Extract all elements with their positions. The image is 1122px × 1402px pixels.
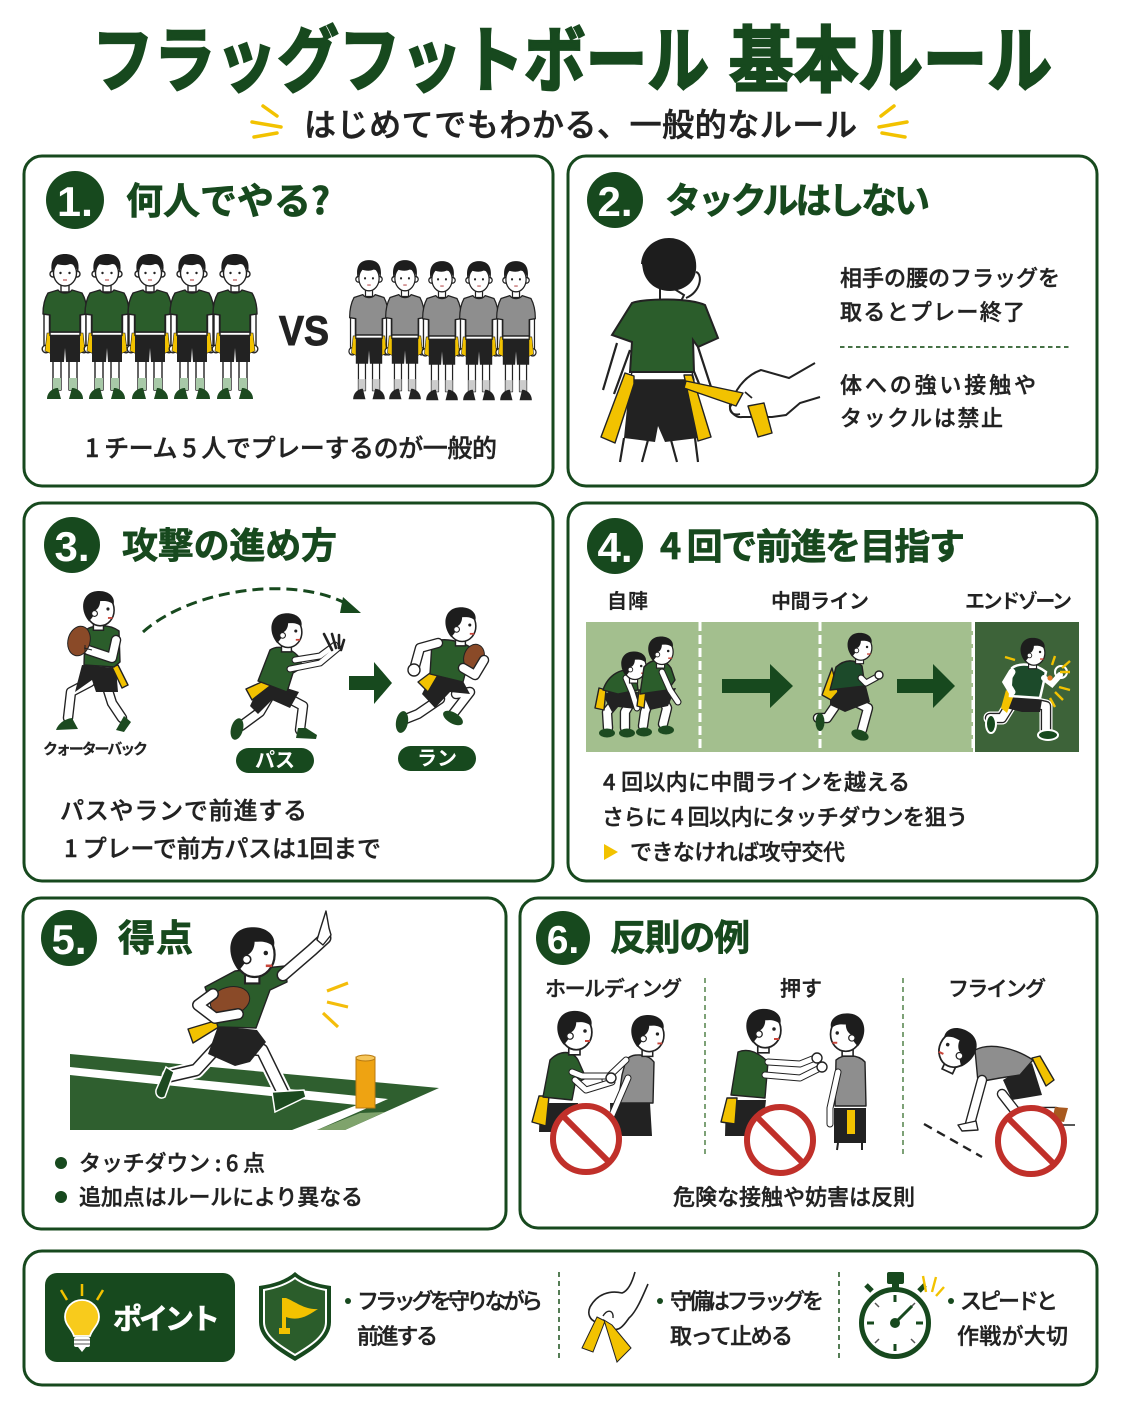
heading: 攻撃の進め方 [122,517,337,569]
run pill [398,742,476,771]
prohibition sign 2 [747,1107,813,1173]
explanation text: できなければ攻守交代 [630,835,845,867]
icon: stopwatch [862,1272,944,1356]
number badge 4 [587,518,643,574]
point label: ポイント [113,1296,220,1338]
point badge [45,1273,235,1362]
explanation text: さらに 4 回以内にタッチダウンを狙う [602,800,968,832]
panel 6: fouls [520,898,1097,1228]
icon: hand grabbing flag [582,1272,648,1362]
caption: 1 チーム 5 人でプレーするのが一般的 [85,429,497,465]
midfield runner [816,633,883,743]
quarterback figure [56,591,131,732]
panel frame [568,503,1097,881]
green team [42,254,258,399]
end zone runner with highlight [986,638,1070,740]
prohibition sign 1 [553,1106,619,1172]
runner figure [394,607,488,734]
title left part: フラッグフットボール [92,2,709,107]
panel frame [520,898,1097,1228]
point text 1: 前進する [357,1319,438,1351]
number badge 5: 5. [51,916,87,963]
explanation text: パスやランで前進する [60,791,307,826]
point text 2: 取って止める [670,1319,793,1351]
two crouching players [595,637,678,738]
number badge 4: 4. [597,524,633,571]
panel 3: how to advance [24,503,553,881]
explanation text: 4 回以内に中間ラインを越える [603,765,910,797]
foul labels: 押す [780,973,822,1003]
bullet list: 追加点はルールにより異なる [79,1180,363,1212]
icon: shield with flag [259,1272,331,1361]
end zone field [70,1054,439,1130]
subtitle [252,100,907,146]
dashed pass arc [143,589,345,632]
zone labels: エンドゾーン [965,585,1072,614]
zone labels: 自陣 [607,585,648,614]
panel 1: how many players [24,156,553,486]
number badge 3: 3. [54,523,90,570]
heading: 何人でやる? [126,171,330,225]
bullet list: タッチダウン : 6 点 [79,1146,265,1178]
title [92,2,1052,107]
pylon [356,1055,375,1108]
number badge 3 [44,517,100,573]
prohibition sign 3 [998,1108,1064,1174]
player from behind with flag being pulled [601,238,820,462]
panel: bottom points [24,1251,1097,1385]
arrow to run [349,662,392,704]
number badge 2: 2. [597,178,633,225]
pass pill: パス [255,744,295,773]
point text 3: 作戦が大切 [957,1319,1068,1351]
heading: タックルはしない [665,172,930,224]
foul labels [545,973,1046,1003]
number badge 1 [46,171,104,229]
heading: 4 回で前進を目指す [660,518,965,570]
pass pill [236,744,314,773]
panel frame [568,156,1097,486]
explanation text [602,765,968,867]
right sparkle [879,106,907,137]
false start illustration [924,1023,1075,1157]
point text 1: フラッグを守りながら [357,1284,543,1316]
number badge 2 [587,172,643,228]
zone labels: 中間ライン [771,585,869,614]
number badge 5 [41,910,97,966]
holding illustration [532,1011,664,1136]
arc arrowhead [340,597,361,613]
bullet list [55,1146,363,1212]
panel frame [24,156,553,486]
panel 2: no tackling [568,156,1097,486]
point text 1 [345,1284,543,1351]
caption: 危険な接触や妨害は反則 [673,1180,915,1212]
panel frame [23,898,506,1229]
point text 3 [948,1284,1068,1351]
VS label: VS [279,307,329,354]
arrow 1 [722,664,793,708]
foul labels: フライング [948,973,1046,1003]
sparkle lines [323,983,348,1027]
explanation text 2 [840,368,1036,433]
point text 2 [657,1284,824,1351]
point text 3: スピードと [960,1284,1058,1316]
number badge 6 [536,911,590,965]
panel 5: scoring [23,898,506,1229]
point text 2: 守備はフラッグを [670,1284,824,1316]
arrow 2 [897,664,955,708]
left sparkle [252,106,281,137]
quarterback label: クォーターバック [43,738,148,759]
explanation text 1: 取るとプレー終了 [840,295,1025,327]
icon: light bulb [61,1284,103,1352]
scoring player [156,911,331,1112]
zone labels [607,585,1072,614]
pushing illustration [721,1009,866,1150]
number badge 1: 1. [57,178,93,225]
run pill: ラン [417,742,457,771]
receiver figure [228,613,344,741]
grey team [349,260,536,400]
subtitle text: はじめてでもわかる、一般的なルール [304,100,857,146]
panel frame [24,503,553,881]
title right part: 基本ルール [729,2,1052,107]
heading: 得点 [118,908,193,962]
explanation text 2: タックルは禁止 [840,401,1003,433]
explanation text 1 [840,261,1060,327]
panel 4: four downs [568,503,1097,881]
explanation text: 1 プレーで前方パスは1回まで [64,829,381,864]
field strip [586,622,1079,752]
number badge 6: 6. [547,919,579,962]
explanation text 1: 相手の腰のフラッグを [840,261,1060,293]
explanation text [60,791,381,864]
foul labels: ホールディング [545,973,682,1003]
explanation text 2: 体への強い接触や [840,368,1036,400]
panel frame [24,1251,1097,1385]
heading: 反則の例 [610,909,750,961]
